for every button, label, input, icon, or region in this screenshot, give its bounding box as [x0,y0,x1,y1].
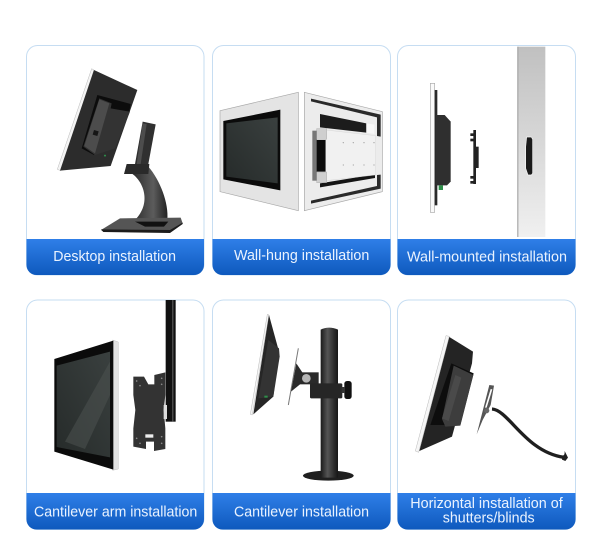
label band [398,493,576,530]
panel: cantilever arm installation [26,300,204,530]
panel: shutters and blinds installation [398,300,576,530]
panel: wall-mounted installation [398,46,576,275]
label band [398,239,576,275]
label band [26,493,204,530]
image: monitor with curved blind mount [415,336,568,461]
label text: Cantilever installation [234,505,369,521]
panel: cantilever installation [212,300,390,530]
label text: Wall-mounted installation [407,250,567,266]
label text: shutters/blinds [443,511,535,527]
image: monitor side view with wall bracket [430,47,545,237]
label text: Cantilever arm installation [34,505,197,521]
label band [212,239,390,275]
image: wall-hung panel front and rear [220,92,382,211]
image: monitor with ceiling arm bracket [54,300,176,470]
label band [212,493,390,530]
label text: Wall-hung installation [234,248,369,264]
label text: Desktop installation [53,249,176,265]
label band [26,239,204,275]
panel: wall-hung installation [212,46,390,275]
image: monitor on desktop stand [57,69,183,233]
image: monitor on pole mount [250,314,354,481]
panel: desktop installation [26,46,204,275]
label text: Horizontal installation of [410,496,564,512]
